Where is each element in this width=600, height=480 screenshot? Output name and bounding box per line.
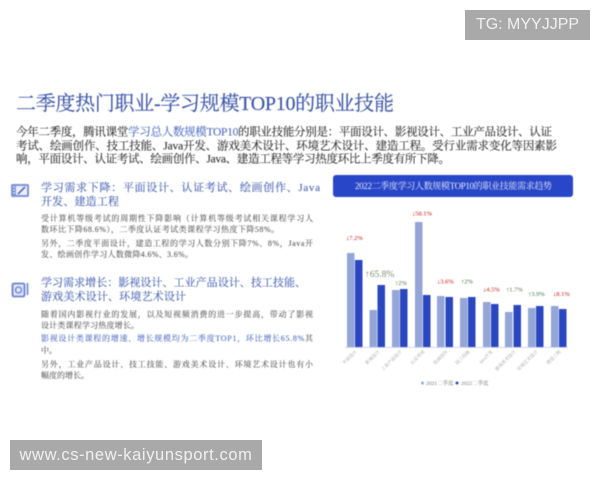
category labels: 影视设计 [364,348,382,366]
category labels: 绘画创作 [432,348,450,366]
section: demand decrease [41,180,320,259]
heading: demand decrease: 学习需求下降：平面设计、认证考试、绘画创作、Java [41,180,320,194]
body text: demand growth: 另外，工业产品设计、技工技能、游戏美术设计、环境艺术设计也有小 [41,359,314,370]
category labels: 技工技能 [454,348,472,366]
change labels: ↓4.5% [483,286,500,294]
intro paragraph: 考试、绘画创作、技工技能、Java开发、游戏美术设计、环境艺术设计、建造工程。受行业需求变化等因素影 [16,138,558,152]
body text: demand decrease: 受计算机等级考试的周期性下降影响（计算机等级考试相关课程学习人 [41,213,313,223]
category labels: 工业产品设计 [379,348,404,373]
change labels: ↑2% [395,280,408,287]
heading: demand growth [41,275,306,303]
body text: demand decrease: 另外，二季度平面设计，建造工程的学习人数分别下降7%、8%，Java开 [41,238,313,249]
intro paragraph: 响，平面设计、认证考试、绘画创作、Java、建造工程等学习热度环比上季度有所下降。 [16,152,450,166]
heading: demand growth: 游戏美术设计、环境艺术设计 [41,289,186,303]
watermark: website: www.cs-new-kaiyunsport.com [20,446,252,464]
category labels: 建造工程 [545,348,563,366]
body text: demand growth [41,309,314,380]
watermark: website [10,440,262,470]
change labels: ↓3.6% [437,278,454,286]
body text: demand growth: 幅度的增长。 [41,370,89,380]
intro paragraph [16,124,558,166]
category labels [341,348,563,373]
change labels [346,210,570,298]
category labels: 游戏美术设计 [493,348,518,373]
bar chart [341,210,570,387]
body text: demand growth: 随着国内影视行业的发展，以及短视频消费的进一步提高，带动了影视 [41,309,313,320]
change labels: ↑65.8% [365,270,394,280]
axis line [345,346,568,348]
category labels: 平面设计 [341,348,359,366]
category labels: Java开发 [477,348,495,365]
watermark: TG handle [465,10,590,40]
icon: pencil in box [11,184,29,197]
legend: 2022二季度 [461,379,489,387]
icon: design tools [12,283,28,296]
legend: 2021二季度 [426,379,454,387]
heading: demand decrease: 开发、建造工程 [41,194,119,208]
intro paragraph: 今年二季度，腾讯课堂学习总人数规模TOP10的职业技能分别是：平面设计、影视设计、工业产品设计、认证 [16,124,552,138]
change labels: ↓8.1% [553,291,570,298]
change labels: ↓7.2% [346,235,363,242]
bars: 2022 Q2 [355,260,566,347]
chart header: 2022二季度学习人数规模TOP10的职业技能需求趋势 [355,180,552,191]
change labels: ↑3.9% [528,291,545,298]
section: demand growth [41,275,314,380]
body text: demand growth: 影视设计类课程的增速、增长规模均为二季度TOP1，环比增长65.8%其 [41,333,314,344]
heading: demand decrease [41,180,320,208]
category labels: 环境艺术设计 [515,348,540,373]
change labels: ↑1.7% [506,286,523,294]
body text: demand decrease: 数环比下降68.6%），二季度认证考试类课程学习热度下降58%。 [41,224,279,235]
change labels: ↓58.1% [412,210,433,218]
category labels: 认证考试 [409,348,427,366]
body text: demand growth: 中。 [41,345,57,355]
heading: demand growth: 学习需求增长：影视设计、工业产品设计、技工技能、 [41,275,306,289]
change labels: ↑2% [461,278,474,286]
bars: 2021 Q2 [347,222,558,347]
title: 二季度热门职业-学习规模TOP10的职业技能 [16,92,394,115]
legend [421,379,489,387]
body text: demand growth: 设计类课程学习热度增长。 [41,320,139,330]
watermark: TG handle: TG: MYYJJPP [476,16,579,33]
body text: demand decrease: 发、绘画创作学习人数微降4.6%、3.6%。 [41,249,193,259]
body text: demand decrease [41,213,313,259]
chart header [333,175,573,197]
